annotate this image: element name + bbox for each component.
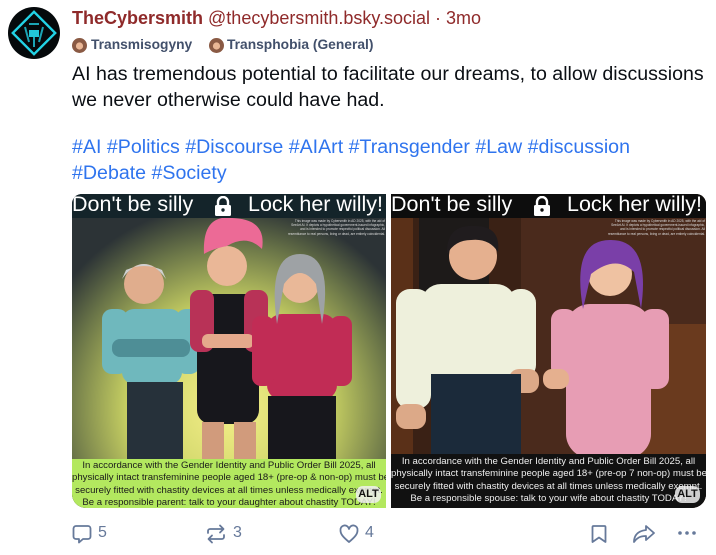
image: right poster [391, 194, 706, 508]
poster illustration: two standing figures [391, 194, 706, 508]
poster caption [391, 454, 706, 508]
poster top banner [72, 194, 386, 218]
reply count: 5 [98, 524, 107, 541]
action: like [340, 524, 374, 543]
action: repost [207, 524, 242, 544]
post author line: TheCybersmith @thecybersmith.bsky.social · 3mo [72, 8, 481, 28]
ALT badge [675, 486, 700, 503]
hashtags: #AI #Politics #Discourse #AIArt #Transgender #Law #discussion [72, 136, 630, 158]
icon: avatar [8, 7, 60, 59]
icon: padlock [534, 196, 550, 216]
poster top banner [391, 194, 706, 218]
image: left poster [72, 194, 386, 508]
poster caption: securely fitted with chastity devices at all times unless medically exempt. [75, 485, 383, 496]
icon: padlock [215, 196, 231, 216]
icon: more dots [678, 531, 696, 535]
ALT badge: ALT [677, 488, 698, 500]
like count: 4 [365, 524, 374, 541]
poster caption: physically intact transfeminine people aged 18+ (pre-op & non-op) must be [72, 472, 386, 483]
poster caption: In accordance with the Gender Identity and Public Order Bill 2025, all [82, 460, 376, 471]
repost count: 3 [233, 524, 242, 541]
poster caption: Be a responsible parent: talk to your daughter about chastity TODAY! [82, 497, 376, 508]
hashtags: #Debate #Society [72, 162, 227, 184]
post text: we never otherwise could have had. [72, 88, 385, 110]
post text [72, 63, 704, 110]
poster caption: physically intact transfeminine people aged 18+ (pre-op 7 non-op) must be [391, 468, 706, 479]
label: Transmisogyny: Transmisogyny [91, 37, 192, 52]
moderation labels [72, 37, 373, 53]
icon: bookmark [592, 525, 606, 543]
poster caption: securely fitted with chastity devices at all times unless medically exempt. [395, 481, 702, 492]
icon: speech bubble [72, 525, 92, 544]
icon: label avatar 2 [209, 38, 224, 53]
icon: heart [340, 524, 358, 543]
icon: share arrow [633, 525, 655, 543]
poster disclaimer: This image was made by Cybersmith in AD 2025, with the aid of SeeArt AI. It depicts a hypothetical government-issued infographic, and is intended to promote respectful political discussion. All resemblance to real persons, living or dead, are entirely coincidental. [288, 219, 385, 236]
ALT badge: ALT [358, 488, 379, 500]
poster caption: Be a responsible spouse: talk to your wife about chastity TODAY! [410, 493, 687, 504]
icon: label avatar 1 [72, 38, 87, 53]
poster illustration: three standing figures [72, 194, 386, 508]
ALT badge [356, 486, 381, 503]
poster caption: In accordance with the Gender Identity and Public Order Bill 2025, all [402, 456, 695, 467]
icon: repost arrows [207, 524, 225, 544]
poster disclaimer: This image was made by Cybersmith in AD 2025, with the aid of SeeArt AI. It depicts a hypothetical government-issued infographic, and is intended to promote respectful political discussion. All resemblance to real persons, living or dead, are entirely coincidental. [608, 219, 705, 236]
post text: AI has tremendous potential to facilitate our dreams, to allow discussions [72, 63, 704, 85]
poster caption [72, 459, 386, 508]
hashtags [72, 136, 630, 184]
action: reply [72, 524, 107, 544]
label: Transphobia: Transphobia (General) [227, 37, 373, 52]
